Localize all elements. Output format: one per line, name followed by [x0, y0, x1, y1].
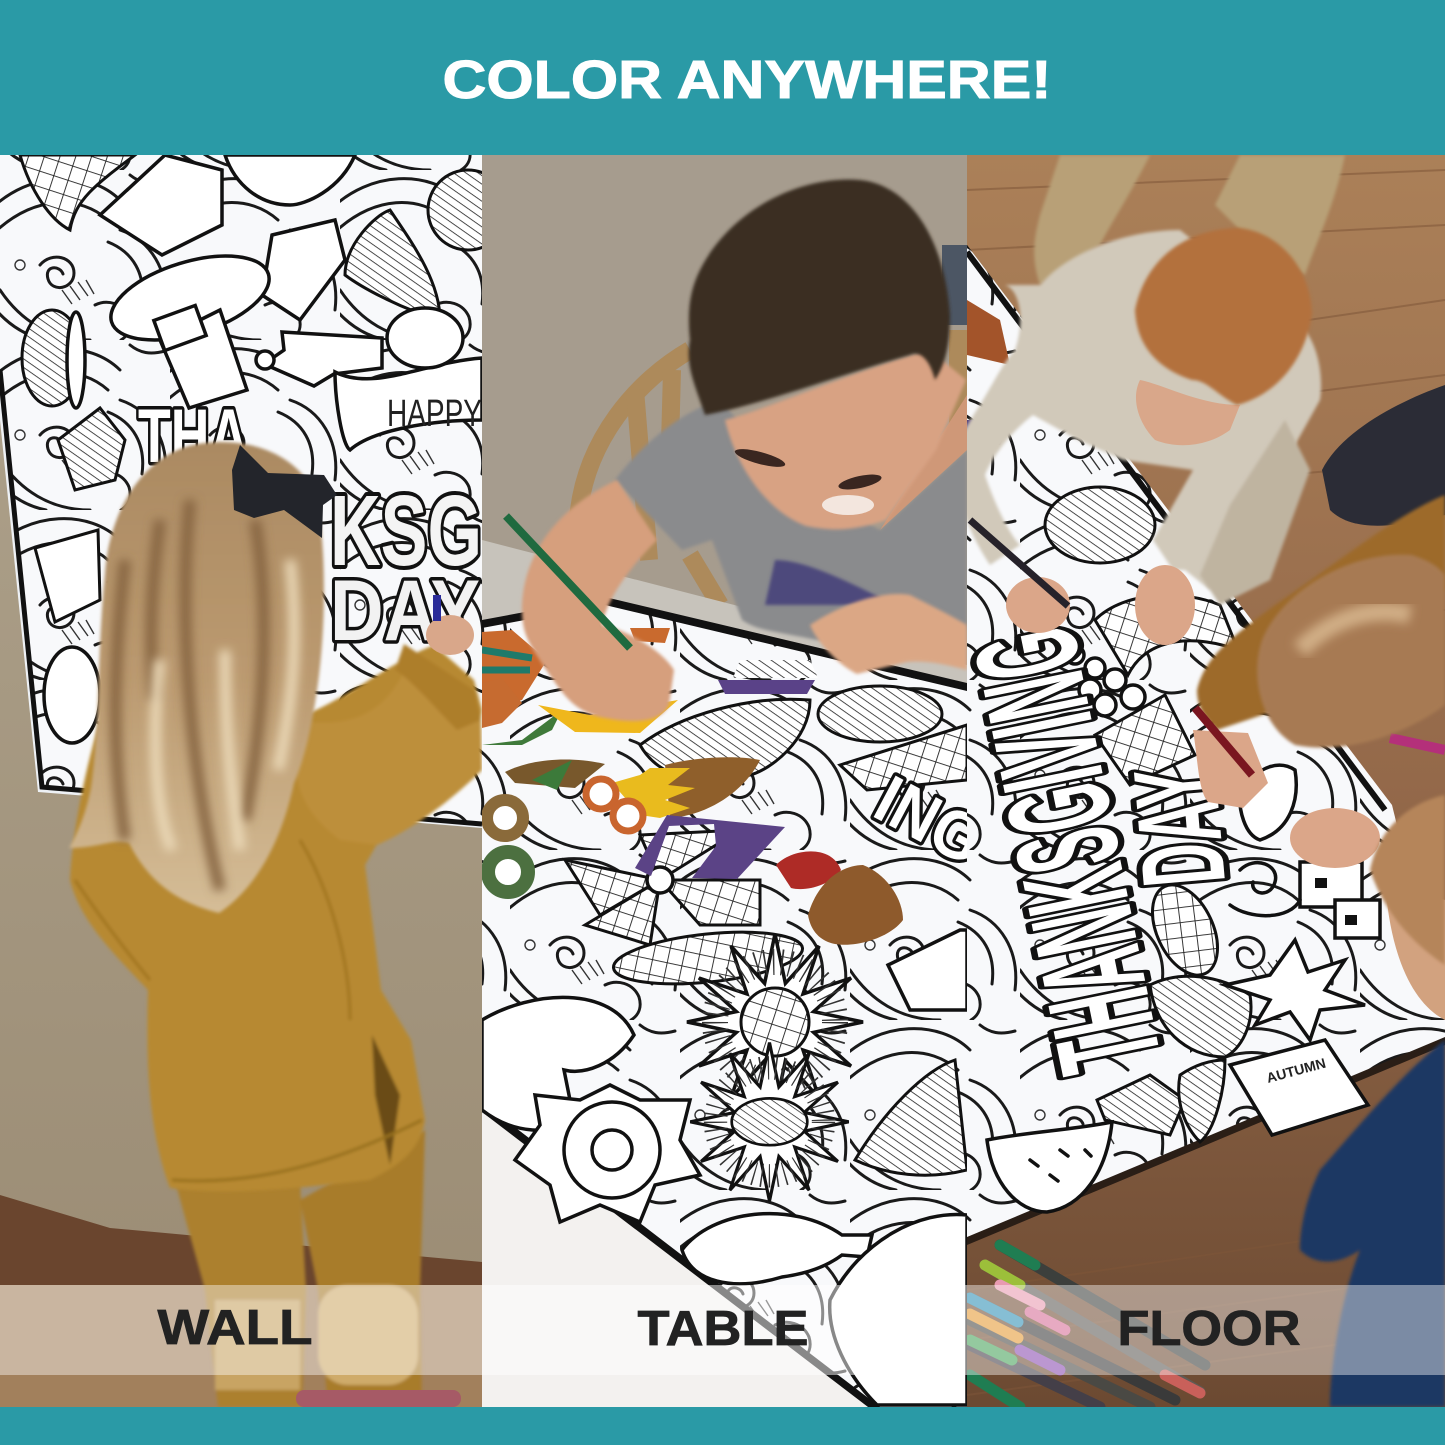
shirt — [615, 400, 967, 640]
right hand — [1135, 565, 1195, 645]
poster lettering — [138, 394, 482, 659]
doodle: turkey leg — [682, 1214, 872, 1284]
doodle: burger — [1045, 487, 1155, 563]
doodle: sunflower — [426, 168, 482, 252]
floor — [0, 1285, 482, 1407]
doodle: lettering: DAY — [1109, 762, 1251, 891]
doodle: mushroom — [482, 997, 634, 1130]
marker — [433, 595, 441, 621]
doodle: pumpkin — [830, 1214, 967, 1405]
chair — [578, 330, 958, 605]
doodle: lettering: ING — [863, 761, 996, 880]
table surface — [482, 540, 967, 683]
doodle: leaves fan — [640, 699, 810, 780]
device behind — [942, 245, 967, 325]
floor boards — [967, 170, 1445, 1395]
poster lettering: DAY — [330, 563, 480, 659]
label bar: floor: FLOOR — [1118, 1302, 1300, 1356]
pen hand — [1193, 730, 1268, 808]
doodle: gift — [262, 220, 345, 320]
label bar: table: TABLE — [638, 1302, 808, 1356]
hand — [426, 615, 474, 655]
sweater shade — [1200, 420, 1310, 605]
poster lettering: THA — [138, 394, 248, 479]
panel: wall — [0, 155, 508, 1407]
doodle: sunflower one — [686, 936, 864, 1093]
doodle: teacup — [987, 1122, 1112, 1212]
doodle: cornucopia net — [20, 155, 135, 230]
doodle: cake — [1097, 1075, 1185, 1135]
wall poster — [0, 155, 508, 828]
doodle: swirl cloud — [1230, 863, 1300, 916]
label bar: table — [482, 1285, 967, 1375]
bow — [232, 445, 337, 538]
label bar: wall: WALL — [158, 1301, 312, 1355]
doodle: leaf — [855, 1060, 967, 1175]
right hand — [810, 594, 967, 674]
doodle: notebook: AUTUMN — [1265, 1055, 1327, 1086]
left arm and hand — [522, 480, 674, 721]
doodle: flower — [1225, 940, 1365, 1040]
doodle: net roll — [1095, 695, 1195, 785]
doodle: autumn book — [35, 530, 100, 622]
doodle: windmill — [565, 830, 760, 945]
doodle: pumpkin — [225, 155, 355, 205]
ginger hair — [1135, 228, 1312, 405]
doodle: notebook — [1230, 1040, 1368, 1135]
doodle: net — [840, 725, 967, 790]
doodle: leaves — [345, 210, 440, 320]
coloured doodles — [482, 628, 903, 945]
doodle: cup — [22, 310, 85, 408]
floor poster — [943, 245, 1445, 1245]
boy in brown shirt — [1193, 495, 1445, 868]
hair — [69, 442, 324, 913]
hair — [1257, 555, 1445, 748]
doodle: cup — [888, 930, 967, 1010]
markers — [970, 1245, 1205, 1407]
doodle: fruit — [339, 684, 368, 701]
dark knee top right — [1322, 385, 1445, 526]
smile — [822, 495, 874, 515]
title: COLOR ANYWHERE! — [442, 50, 1052, 110]
doodle: pumpkin slice — [1150, 976, 1251, 1057]
doodle: corn — [1139, 875, 1231, 985]
khaki legs — [1034, 155, 1345, 285]
panel: table — [482, 155, 996, 1407]
doodle: corn — [612, 930, 804, 986]
doodle: leaf — [1179, 1060, 1225, 1142]
doodle: net bowl — [1095, 595, 1238, 675]
doodle: pilgrim hat — [109, 254, 271, 410]
doodle: cake — [58, 408, 125, 490]
eye right — [837, 472, 883, 492]
pencil — [506, 516, 630, 648]
doodle: ribbon: HAPPY — [387, 393, 482, 435]
boy — [506, 180, 967, 721]
doodle: buildings — [1300, 862, 1380, 938]
face — [1385, 880, 1445, 1020]
footer band — [0, 1407, 1445, 1445]
girl — [69, 442, 482, 1407]
doodle: house — [100, 155, 222, 255]
poster lettering: KSG — [330, 475, 482, 587]
hair — [1370, 795, 1445, 965]
pink marker — [1390, 738, 1445, 750]
doodle: lettering — [943, 616, 1251, 1084]
sweater — [70, 644, 482, 1191]
header band — [0, 0, 1445, 155]
label bar: wall — [0, 1285, 482, 1375]
label bar: floor — [967, 1285, 1445, 1375]
doodle: apple — [387, 308, 463, 368]
doodle: pear — [1240, 765, 1296, 840]
doodle: pumpkin lower — [44, 647, 100, 743]
baseboard — [0, 1195, 482, 1290]
marker in hand — [970, 520, 1068, 606]
doodle: ribbon — [264, 332, 482, 450]
pants — [172, 1130, 425, 1407]
doodle: berries — [1066, 646, 1145, 716]
eye left — [733, 445, 787, 471]
doodle: melon — [818, 686, 942, 742]
doodle: sunflower two — [690, 1043, 849, 1201]
face — [1136, 380, 1240, 445]
table poster — [482, 597, 996, 1407]
hair — [689, 180, 950, 415]
boy in cream sweater — [954, 155, 1345, 645]
panel: floor — [943, 155, 1445, 1407]
shirt print — [765, 560, 895, 605]
face — [725, 350, 966, 529]
red marker — [1195, 708, 1252, 775]
neck — [880, 395, 967, 530]
shoes — [296, 1390, 461, 1407]
other hand — [1290, 808, 1380, 868]
sweater — [954, 230, 1321, 590]
doodle: flower — [256, 351, 274, 369]
left hand — [1006, 577, 1070, 633]
doodle: star wheel — [515, 1085, 700, 1222]
boy in navy shirt — [1300, 795, 1445, 1407]
